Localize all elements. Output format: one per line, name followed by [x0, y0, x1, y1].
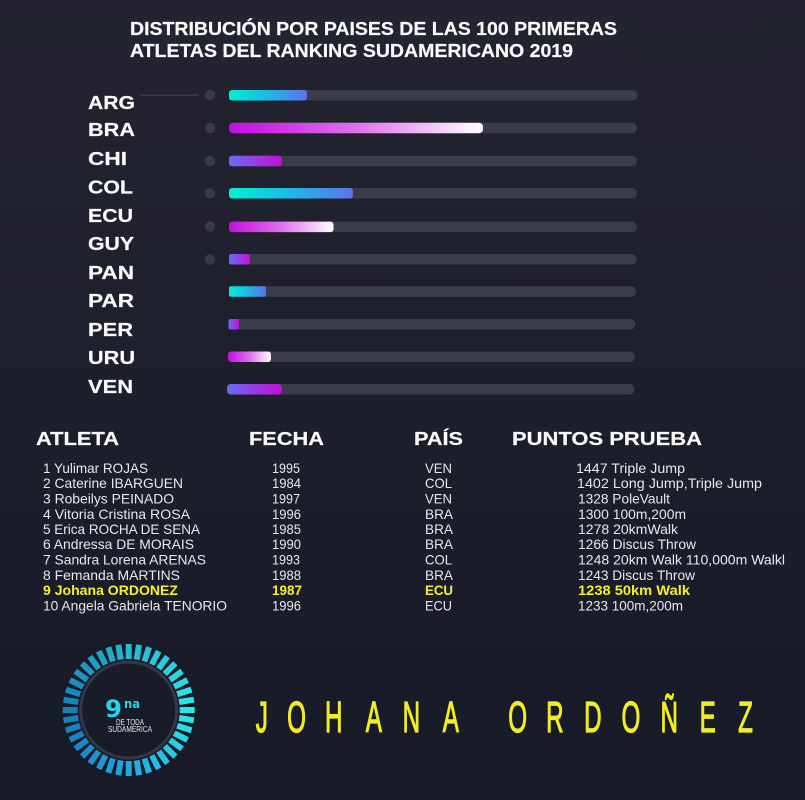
country labels: COL [88, 178, 133, 198]
table: athlete names: 8 Femanda MARTINS [43, 567, 180, 583]
country labels: VEN [88, 377, 133, 397]
table: countries [425, 460, 454, 614]
table: countries: VEN [425, 490, 452, 506]
table: countries: BRA [425, 506, 454, 522]
radial gauge: 9na de toda Sudamerica: 9 [105, 695, 122, 723]
country labels [88, 93, 135, 397]
table: points and events: 1300 100m,200m [578, 506, 686, 522]
table: countries: BRA [425, 536, 454, 552]
table: athlete names: 3 Robeilys PEINADO [43, 490, 174, 506]
table: athlete names: 10 Angela Gabriela TENORIO [43, 598, 227, 614]
table: points and events: 1243 Discus Throw [578, 567, 696, 583]
table: countries: COL [425, 475, 452, 491]
connector line and dots [140, 90, 215, 265]
table: athlete names: 9 Johana ORDONEZ [43, 582, 178, 598]
title: DISTRIBUCIÓN POR PAISES DE LAS 100 PRIMERAS [130, 18, 617, 39]
table: athlete names: 5 Erica ROCHA DE SENA [43, 521, 201, 537]
table header: PAÍS [414, 428, 463, 449]
table: points and events: 1266 Discus Throw [578, 536, 697, 552]
table header: PUNTOS PRUEBA [512, 429, 702, 449]
table: athlete names [43, 460, 227, 614]
table: birth years: 1988 [272, 567, 301, 583]
table: countries: COL [425, 552, 452, 568]
table: birth years: 1984 [272, 475, 301, 491]
title: ATLETAS DEL RANKING SUDAMERICANO 2019 [130, 41, 573, 61]
table: countries: BRA [425, 521, 454, 537]
country labels: URU [88, 348, 135, 368]
table: athlete names: 6 Andressa DE MORAIS [43, 536, 194, 552]
table: birth years: 1996 [272, 598, 301, 614]
country labels: ECU [88, 206, 133, 226]
table: points and events: 1402 Long Jump,Triple Jump [577, 475, 762, 491]
table: birth years: 1990 [272, 536, 301, 552]
athlete name: JOHANA ORDOÑEZ [256, 692, 753, 742]
table: points and events: 1238 50km Walk [578, 582, 690, 598]
table: athlete names: 2 Caterine IBARGUEN [43, 475, 183, 491]
table: countries: ECU [425, 582, 453, 598]
table header [36, 428, 702, 449]
table: birth years: 1995 [272, 460, 300, 476]
table header: FECHA [249, 429, 324, 449]
table: birth years: 1996 [272, 506, 301, 522]
title [130, 18, 617, 61]
table: points and events: 1248 20km Walk 110,000m Walkl [578, 552, 785, 568]
country labels: PAR [88, 291, 134, 311]
radial gauge: 9na de toda Sudamerica [63, 644, 195, 776]
country labels: CHI [88, 149, 127, 169]
table: points and events [576, 460, 785, 614]
table: birth years: 1993 [272, 552, 300, 568]
radial gauge: 9na de toda Sudamerica: SUDAMERICA [108, 725, 153, 734]
country labels: GUY [88, 234, 134, 254]
table: points and events: 1328 PoleVault [578, 490, 670, 506]
table: points and events: 1233 100m,200m [578, 598, 683, 614]
bar chart [227, 90, 638, 394]
table: birth years [272, 460, 302, 614]
country labels: ARG [88, 93, 135, 113]
country labels: PER [88, 320, 133, 340]
table: countries: ECU [425, 598, 452, 614]
table: countries: BRA [425, 567, 454, 583]
table: countries: VEN [425, 460, 452, 476]
table: birth years: 1997 [272, 490, 300, 506]
table: points and events: 1278 20kmWalk [578, 521, 679, 537]
table header: ATLETA [36, 429, 119, 449]
country labels: BRA [88, 120, 135, 140]
country labels: PAN [88, 263, 134, 283]
table: athlete names: 4 Vitoria Cristina ROSA [43, 506, 191, 522]
table: birth years: 1987 [272, 582, 302, 598]
radial gauge: 9na de toda Sudamerica: na [124, 697, 140, 711]
table: points and events: 1447 Triple Jump [576, 460, 685, 476]
radial gauge: 9na de toda Sudamerica: DE TODA [116, 718, 145, 727]
table: birth years: 1985 [272, 521, 301, 537]
table: athlete names: 7 Sandra Lorena ARENAS [43, 552, 206, 568]
table: athlete names: 1 Yulimar ROJAS [43, 460, 148, 476]
